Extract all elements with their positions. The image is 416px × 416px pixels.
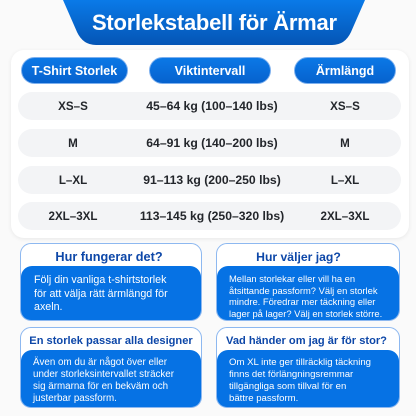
header: Viktintervall — [149, 57, 271, 84]
info box: Vad händer om jag är för stor?: finns det förlängningsremmar — [229, 368, 353, 380]
info box: En storlek passar alla designer: justerbar passform. — [33, 392, 117, 404]
info box: Vad händer om jag är för stor?: Vad händer om jag är för stor? — [226, 335, 387, 347]
info box: Vad händer om jag är för stor?: bättre passform. — [229, 392, 298, 404]
row: L-XL: L–XL — [331, 174, 359, 187]
row: M: 64–91 kg (140–200 lbs) — [146, 136, 278, 150]
header: Ärmlängd — [294, 57, 396, 84]
info box: Vad händer om jag är för stor?: tillgängliga som tillval för en — [229, 380, 346, 392]
row: M — [18, 129, 401, 157]
header: T-Shirt Storlek — [21, 57, 128, 84]
row: XS-S: XS–S — [330, 100, 360, 113]
info box: Hur fungerar det?: för att välja rätt ärmlängd för — [34, 288, 168, 300]
title banner: Storlekstabell för Ärmar — [92, 10, 337, 35]
row: XS-S — [18, 92, 401, 120]
row: 2XL-3XL: 2XL–3XL — [48, 210, 97, 223]
row: XS-S: XS–S — [58, 100, 88, 113]
info box: Hur väljer jag?: åtsittande passform? Välj en storlek — [229, 285, 378, 296]
row: XS-S: 45–64 kg (100–140 lbs) — [146, 99, 278, 113]
row: 2XL-3XL: 2XL–3XL — [320, 210, 369, 223]
row: L-XL: L–XL — [59, 174, 87, 187]
info box: Hur väljer jag?: Mellan storlekar eller vill ha en — [229, 273, 355, 284]
row: L-XL — [18, 166, 401, 194]
row: 2XL-3XL: 113–145 kg (250–320 lbs) — [140, 209, 284, 223]
info box: Hur väljer jag? — [216, 243, 400, 321]
info box: En storlek passar alla designer — [20, 327, 202, 408]
row: L-XL: 91–113 kg (200–250 lbs) — [143, 173, 281, 187]
title banner — [63, 0, 365, 45]
row: M: M — [68, 137, 78, 150]
info box: Vad händer om jag är för stor? — [216, 327, 400, 408]
row: 2XL-3XL — [18, 202, 401, 230]
info box: En storlek passar alla designer: sig ärmarna för en bekväm och — [33, 380, 168, 392]
info box: Hur väljer jag?: mindre. Föredrar mer täckning eller — [229, 296, 375, 307]
header: T-Shirt Storlek: T-Shirt Storlek — [32, 64, 117, 78]
info box: Vad händer om jag är för stor?: Om XL inte ger tillräcklig täckning — [229, 356, 371, 368]
info box: Hur fungerar det?: Följ din vanliga t-shirtstorlek — [34, 274, 166, 286]
info box: Hur fungerar det?: Hur fungerar det? — [55, 250, 163, 264]
info box: Hur fungerar det? — [20, 243, 202, 321]
info box: En storlek passar alla designer: under storleksintervallet sträcker — [33, 368, 174, 380]
info box: En storlek passar alla designer: En storlek passar alla designer — [29, 335, 193, 347]
info box: Hur väljer jag?: lager på lager? Välj en storlek större. — [229, 308, 382, 319]
size table panel — [11, 50, 409, 238]
info box: En storlek passar alla designer: Även om du är något över eller — [33, 356, 167, 368]
info box: Hur väljer jag?: Hur väljer jag? — [256, 250, 341, 264]
header: Viktintervall: Viktintervall — [175, 64, 245, 78]
row: M: M — [340, 137, 350, 150]
header: Ärmlängd: Ärmlängd — [316, 64, 374, 78]
info box: Hur fungerar det?: axeln. — [34, 301, 63, 313]
